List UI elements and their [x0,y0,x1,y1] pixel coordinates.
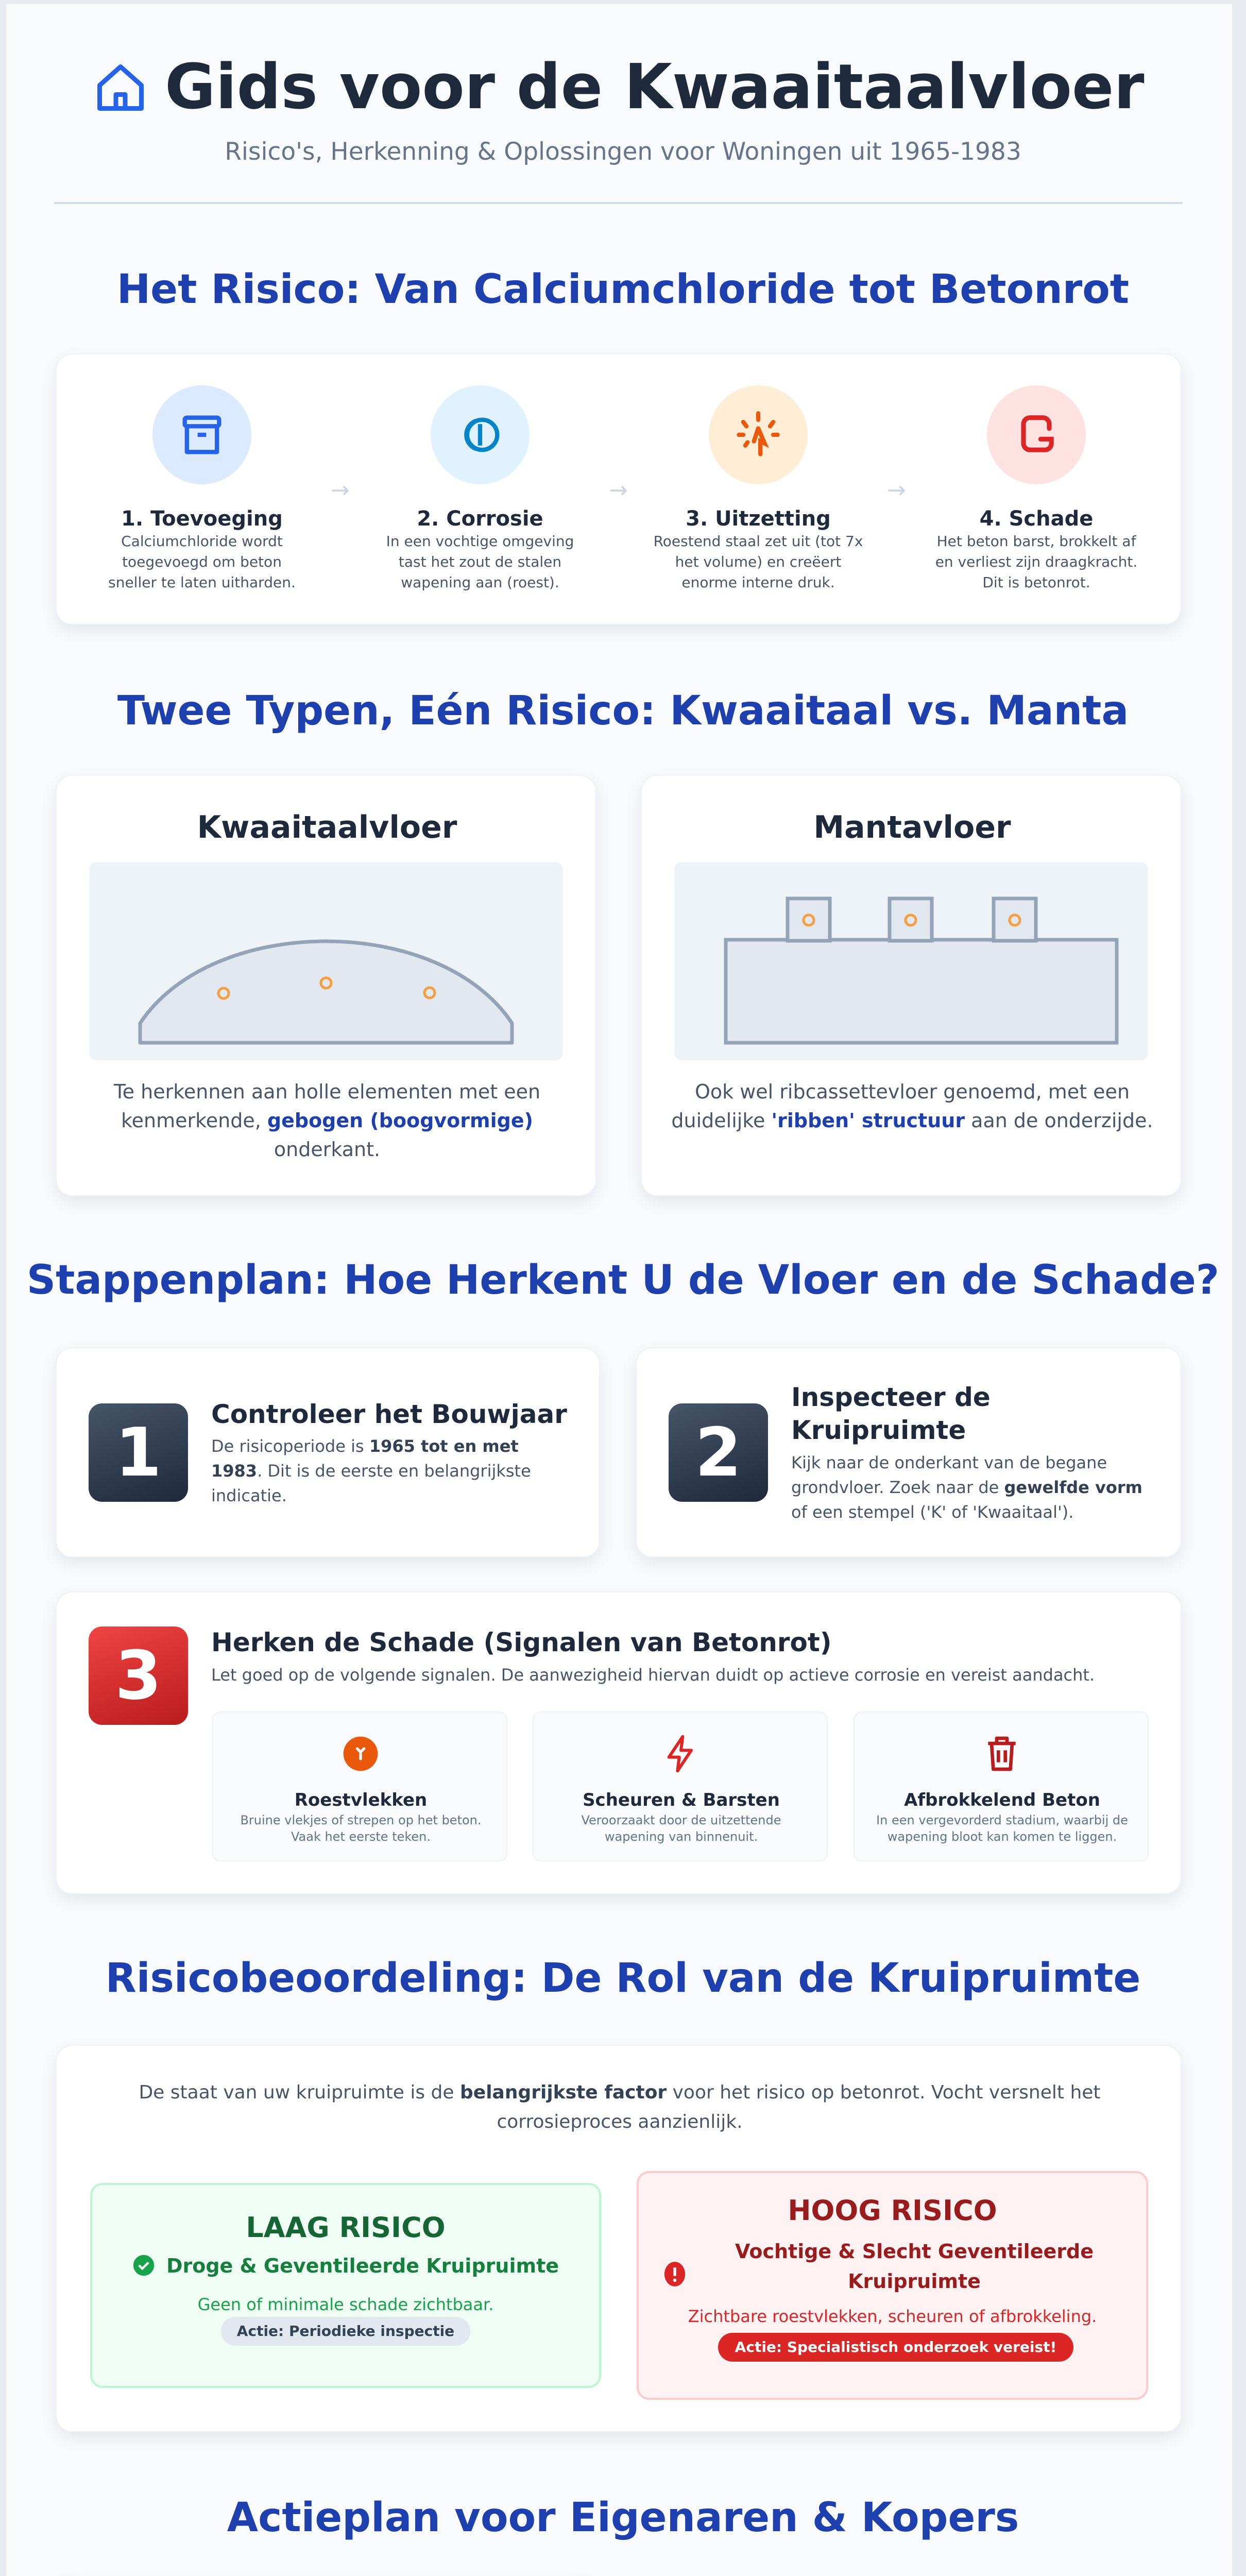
panel: step 3: Herken de Schade (Signalen van Betonrot) [211,1628,832,1657]
sub: afbrokkelend: Afbrokkelend Beton [904,1790,1100,1810]
icon: damage [987,385,1086,484]
step 4: Het beton barst, brokkelt af en verliest zijn draagkracht. Dit is betonrot. [935,533,1137,591]
step 3 [654,385,863,591]
panel: risk assessment: De staat van uw kruipruimte is de belangrijkste factor voor het risico op betonrot. Vocht versnelt het corrosieproces aanzienlijk. [139,2082,1101,2132]
step 3: 3. Uitzetting [686,507,831,531]
icon: box [152,385,251,484]
arrow: → [331,477,350,503]
icon: house [97,64,144,111]
step 1 [108,385,296,591]
panel: step 3 [56,1591,1182,1894]
heading: Risicobeoordeling: Risicobeoordeling: De Rol van de Kruipruimte [106,1955,1140,2002]
low risk box: Actie: Periodieke inspectie [237,2323,454,2340]
low risk box: LAAG RISICO [246,2211,446,2244]
sub: roestvlekken [212,1711,507,1861]
header [97,52,1145,166]
panel: step 1: De risicoperiode is 1965 tot en met 1983. Dit is de eerste en belangrijkste indicatie. [211,1436,531,1505]
heading: Het Risico: Het Risico: Van Calciumchloride tot Betonrot [117,266,1129,313]
diagram: ribs [674,862,1148,1060]
sub: roestvlekken: Roestvlekken [295,1790,427,1810]
high risk box: HOOG RISICO [788,2194,997,2227]
high risk box: Actie: Specialistisch onderzoek vereist! [735,2338,1056,2355]
icon: burst [709,385,808,484]
panel: step 1: Controleer het Bouwjaar [211,1399,567,1429]
heading: Stappenplan: Stappenplan: Hoe Herkent U de Vloer en de Schade? [27,1257,1219,1303]
sub: roestvlekken: Bruine vlekjes of strepen op het beton. Vaak het eerste teken. [240,1813,482,1844]
subtitle: Risico's, Herkenning & Oplossingen voor Woningen uit 1965-1983 [225,138,1021,166]
low risk box: Droge & Geventileerde Kruipruimte [166,2255,559,2277]
step 2: 2. Corrosie [417,507,543,531]
panel: risk assessment [56,2045,1182,2432]
panel: step 3: Let goed op de volgende signalen. De aanwezigheid hiervan duidt op actieve corrosie en vereist aandacht. [211,1665,1095,1685]
diagram: arch [89,862,563,1060]
panel: mantavloer: Mantavloer [813,809,1011,845]
sub: scheuren: Veroorzaakt door de uitzettende wapening van binnenuit. [581,1813,781,1844]
high risk box: Zichtbare roestvlekken, scheuren of afbrokkeling. [688,2307,1097,2326]
badge 3: 3 [115,1636,162,1715]
step 4 [935,385,1137,591]
step 2 [386,385,574,591]
icon: corrosion [431,385,530,484]
badge 3 [89,1626,188,1725]
low risk box: Geen of minimale schade zichtbaar. [198,2295,493,2314]
panel: kwaaitaalvloer: Te herkennen aan holle elementen met een kenmerkende, gebogen (boogvormige) onderkant. [114,1080,540,1161]
sub: scheuren: Scheuren & Barsten [583,1790,780,1810]
step 2: In een vochtige omgeving tast het zout de stalen wapening aan (roest). [386,533,574,591]
heading: Actieplan: Actieplan voor Eigenaren & Kopers [227,2495,1019,2541]
badge 2 [669,1403,768,1502]
panel: step 1 [56,1347,600,1557]
arrow: → [609,477,628,503]
badge 1: 1 [115,1413,162,1492]
sub: scheuren [533,1711,828,1861]
step 1: 1. Toevoeging [121,507,283,531]
panel: step 2: Kijk naar de onderkant van de begane grondvloer. Zoek naar de gewelfde vorm of een stempel ('K' of 'Kwaaitaal'). [791,1453,1142,1522]
panel: step 2 [636,1347,1182,1557]
sub: afbrokkelend [854,1711,1149,1861]
badge 2: 2 [695,1413,742,1492]
panel: kwaaitaalvloer [56,775,596,1196]
title: Gids voor de Kwaaitaalvloer [165,52,1145,123]
high risk box: Vochtige & Slecht Geventileerde Kruipruimte [735,2240,1094,2293]
step 1: Calciumchloride wordt toegevoegd om beton sneller te laten uitharden. [108,533,296,591]
sub: afbrokkelend: In een vergevorderd stadium, waarbij de wapening bloot kan komen te liggen. [876,1813,1128,1844]
step 4: 4. Schade [980,507,1093,531]
arrow: → [887,477,906,503]
high risk box [637,2171,1148,2400]
badge 1 [89,1403,188,1502]
panel: kwaaitaalvloer: Kwaaitaalvloer [197,809,457,845]
panel: process [56,353,1182,625]
heading: Twee Typen: Twee Typen, Eén Risico: Kwaaitaal vs. Manta [117,688,1129,734]
step 3: Roestend staal zet uit (tot 7x het volume) en creëert enorme interne druk. [654,533,863,591]
panel: step 2: Inspecteer de Kruipruimte [791,1382,991,1445]
low risk box [90,2183,601,2388]
panel: mantavloer: Ook wel ribcassettevloer genoemd, met een duidelijke 'ribben' structuur aan de onderzijde. [671,1080,1153,1132]
panel: mantavloer [641,775,1182,1196]
